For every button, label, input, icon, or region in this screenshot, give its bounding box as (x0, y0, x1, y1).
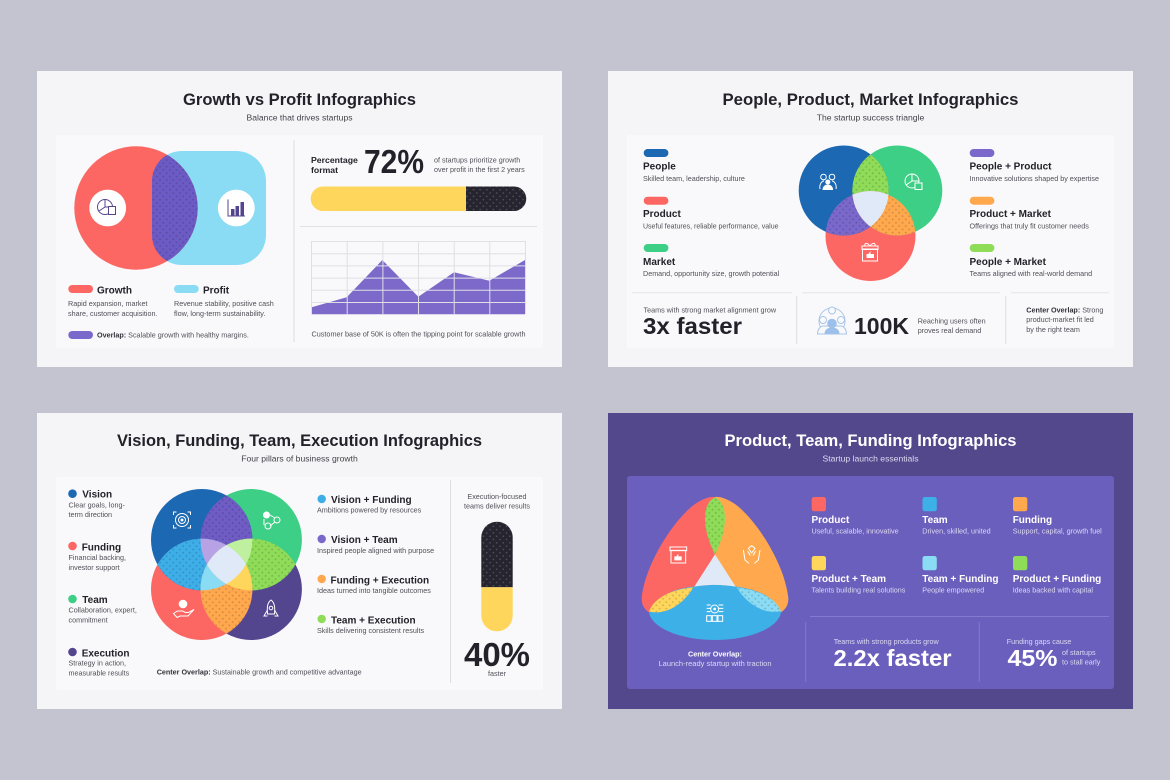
legend: vision + team: Vision + Team (331, 535, 398, 546)
icon: pie chart (89, 190, 126, 226)
legend: product: Useful features, reliable performance, value (643, 222, 779, 230)
legend: product (643, 197, 779, 230)
legend: people + product (970, 149, 1099, 183)
stat: 40 percent: faster (488, 669, 507, 678)
legend: team: Driven, skilled, united (922, 526, 991, 535)
center overlap note: by the right team (1026, 325, 1080, 334)
legend: growth: Growth (97, 286, 132, 296)
legend: team: Team (922, 515, 948, 526)
icon: target (174, 512, 190, 528)
legend: product + team: Product + Team (812, 574, 886, 585)
legend: execution (68, 648, 130, 678)
legend: execution: measurable results (68, 668, 130, 678)
icon: team gear (707, 605, 723, 621)
stat: 100K: proves real demand (918, 326, 981, 335)
legend: vision + team: Inspired people aligned with purpose (317, 546, 434, 555)
legend: team: Collaboration, expert, (68, 606, 137, 614)
legend: vision: Clear goals, long- (68, 500, 125, 509)
legend: people (643, 149, 745, 183)
subtitle: Balance that drives startups (246, 112, 353, 122)
legend: market (643, 244, 780, 278)
legend: funding + execution: Funding + Execution (330, 575, 429, 586)
legend: product + team (812, 556, 906, 594)
icon: people (820, 174, 836, 190)
legend: funding: Support, capital, growth fuel (1013, 526, 1102, 535)
stat: 100K (854, 313, 986, 339)
legend: product + market: Offerings that truly fit customer needs (970, 222, 1089, 230)
legend: vision + funding (317, 495, 422, 515)
legend: profit: Revenue stability, positive cash (174, 299, 274, 308)
stat: 100K: 100K (854, 313, 909, 339)
stat caption: teams deliver results (464, 502, 530, 510)
legend: profit (174, 285, 274, 318)
stat caption: Execution-focused (467, 492, 527, 501)
center overlap note: product-market fit led (1026, 315, 1094, 324)
icon: pie chart (905, 174, 922, 190)
legend: people: People (643, 162, 676, 173)
legend: vision: term direction (68, 510, 112, 519)
venn diagram: rounded triangle (642, 497, 788, 640)
legend: product + funding (1013, 556, 1101, 594)
legend: product: Product (643, 209, 681, 220)
legend: profit: Profit (203, 286, 230, 296)
legend: funding: Funding (1013, 515, 1052, 526)
legend: growth (68, 285, 158, 318)
legend: profit: flow, long-term sustainability. (174, 309, 265, 318)
legend: growth: Rapid expansion, market (68, 299, 148, 308)
chart caption: Customer base of 50K is often the tipping point for scalable growth (312, 330, 526, 339)
legend: funding: Funding (82, 542, 121, 554)
legend: funding (68, 542, 126, 572)
title: Product, Team, Funding Infographics (724, 432, 1016, 450)
stat: 3x faster: Teams with strong market alignment grow (644, 306, 777, 314)
title: Growth vs Profit Infographics (183, 91, 416, 109)
panel: growth vs profit (37, 71, 562, 367)
legend: product + team: Talents building real solutions (812, 585, 906, 594)
legend: product: Useful, scalable, innovative (812, 526, 899, 535)
legend: team (68, 595, 137, 624)
icon: gift (670, 547, 687, 563)
legend: product + market: Product + Market (970, 209, 1052, 220)
stat: 72 percent: Percentage (311, 155, 358, 165)
stat: 72 percent: 72% (364, 143, 424, 180)
stat: 45 percent: Funding gaps cause (1007, 637, 1071, 646)
stat: 45 percent: 45% (1008, 645, 1058, 671)
stat: 100K: Reaching users often (918, 316, 986, 325)
stat caption (464, 492, 530, 510)
progress bar (311, 186, 526, 211)
icon: hand with coin (174, 600, 194, 618)
legend: vision + funding: Ambitions powered by resources (317, 506, 422, 515)
legend: market: Market (643, 257, 676, 268)
center overlap note: Center Overlap: Strong (1026, 305, 1103, 314)
legend: team + funding (922, 556, 999, 594)
area chart (312, 241, 526, 314)
stat: 72 percent: over profit in the first 2 years (434, 165, 525, 174)
icon: gift (862, 243, 878, 261)
legend: product: Product (812, 515, 850, 526)
panel: product team funding (608, 413, 1133, 709)
stat: 45 percent: of startups (1062, 648, 1096, 657)
center overlap note: Launch-ready startup with traction (658, 659, 772, 668)
legend: team + funding: Team + Funding (922, 574, 999, 585)
icon: rocket (264, 600, 278, 616)
legend: overlap: Overlap: Scalable growth with healthy margins. (97, 330, 249, 340)
legend: people + market (970, 244, 1092, 278)
legend: people: Skilled team, leadership, culture (643, 174, 745, 183)
legend: team (922, 497, 991, 535)
legend: team: commitment (68, 616, 108, 624)
panel: people product market (608, 71, 1133, 367)
legend: people + market: Teams aligned with real-world demand (970, 269, 1092, 278)
legend: vision: Vision (82, 490, 112, 500)
icon: hands (743, 546, 760, 563)
legend: team + execution: Skills delivering consistent results (317, 626, 424, 635)
stat: 72 percent: format (311, 165, 338, 175)
stat: 45 percent: to stall early (1062, 658, 1101, 667)
venn diagram: three circles (799, 146, 942, 281)
icon: team network (263, 512, 280, 529)
legend: vision (68, 489, 125, 519)
stat: 45 percent (1007, 637, 1101, 671)
legend: growth: share, customer acquisition. (68, 309, 158, 318)
legend: execution: Strategy in action, (68, 658, 126, 668)
panel: vision funding team execution (37, 413, 562, 709)
center overlap note (1026, 305, 1103, 334)
legend: team + funding: People empowered (922, 585, 984, 594)
vertical progress pill (481, 522, 513, 631)
legend: product + funding: Product + Funding (1013, 574, 1101, 585)
stat: 3x faster (643, 306, 777, 339)
title: People, Product, Market Infographics (722, 91, 1018, 109)
center overlap note: Center Overlap: Sustainable growth and competitive advantage (157, 668, 362, 676)
legend: product + market (970, 197, 1089, 230)
legend: team + execution (317, 615, 424, 635)
stat: 2.2x faster: Teams with strong products grow (834, 637, 940, 646)
center overlap note (658, 650, 772, 668)
legend: product + funding: Ideas backed with capital (1013, 585, 1093, 594)
legend: people + product: People + Product (970, 162, 1052, 173)
venn diagram: growth and profit (74, 146, 266, 270)
venn diagram: four circles (151, 489, 302, 640)
legend: people + market: People + Market (970, 257, 1047, 268)
center overlap note: Center Overlap: (688, 650, 742, 658)
icon: users circle (818, 307, 846, 334)
legend: market: Demand, opportunity size, growth potential (643, 269, 780, 278)
stat: 72 percent: of startups prioritize growth (434, 156, 520, 164)
stat: 2.2x faster: 2.2x faster (834, 645, 952, 671)
legend: product (812, 497, 899, 535)
legend: team: Team (82, 595, 108, 606)
subtitle: Four pillars of business growth (241, 454, 358, 464)
stat: 72 percent (311, 143, 525, 180)
legend: funding (1013, 497, 1102, 535)
legend: people + product: Innovative solutions shaped by expertise (970, 174, 1099, 183)
legend: funding + execution (317, 575, 431, 595)
stat: 40 percent: 40% (464, 636, 530, 673)
legend: team + execution: Team + Execution (331, 615, 416, 626)
icon: bar chart (218, 190, 255, 226)
legend: vision + funding: Vision + Funding (331, 495, 412, 506)
legend: vision + team (317, 535, 434, 555)
subtitle: Startup launch essentials (822, 454, 919, 464)
title: Vision, Funding, Team, Execution Infographics (117, 432, 482, 450)
legend: execution: Execution (82, 648, 129, 659)
subtitle: The startup success triangle (817, 112, 924, 122)
stat: 3x faster: 3x faster (643, 313, 742, 339)
legend: funding + execution: Ideas turned into tangible outcomes (317, 586, 431, 595)
legend: funding: investor support (68, 563, 120, 572)
legend: funding: Financial backing, (68, 553, 126, 562)
